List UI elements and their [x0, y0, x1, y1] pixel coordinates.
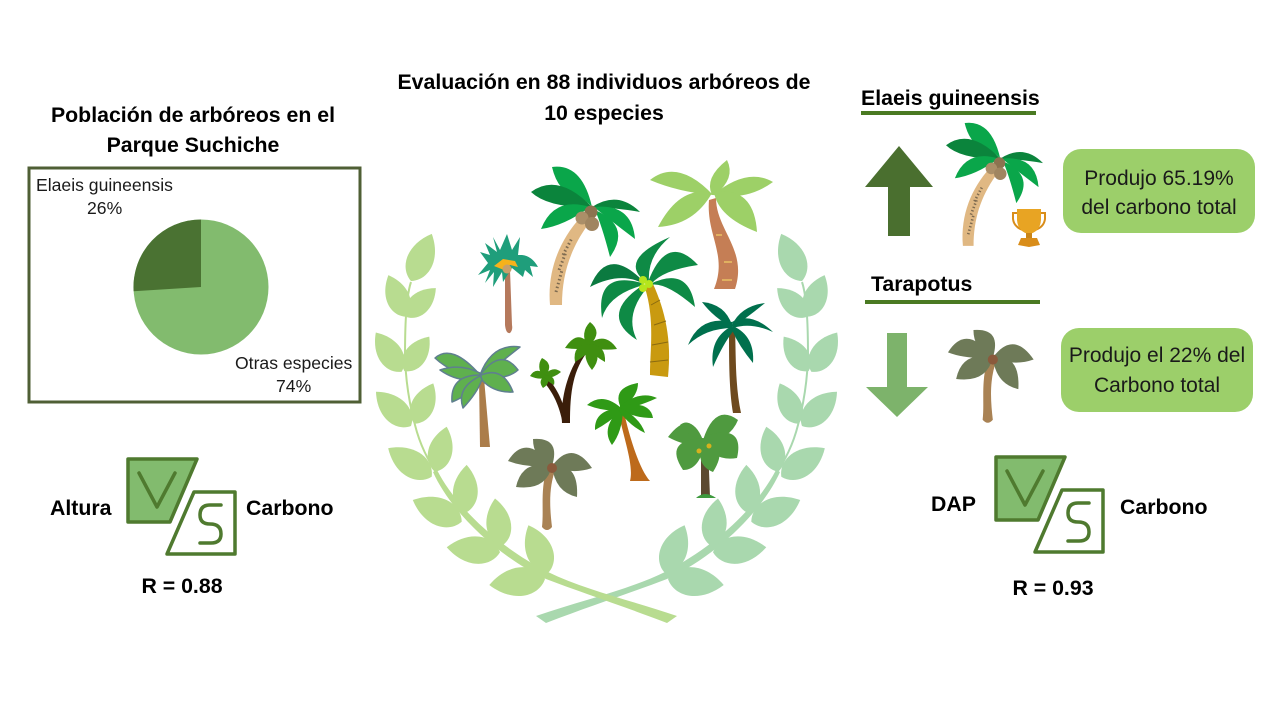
pie slice: Elaeis guineensis	[133, 219, 201, 291]
callout: 22%	[1061, 328, 1253, 412]
palm: coconut tan trunk	[531, 167, 640, 305]
callout: 65.19%: Produjo 65.19%	[1084, 167, 1234, 190]
panel: pie chart population	[29, 168, 360, 402]
underline: Elaeis guineensis	[861, 111, 1036, 115]
palm: central gold trunk	[590, 237, 698, 377]
arrow down	[866, 333, 928, 417]
pie label: otras especies: Otras especies	[235, 353, 353, 373]
palm: bright green orange trunk	[587, 383, 657, 481]
palm: round green with fruit	[668, 415, 738, 498]
palm: Tarapotus icon	[948, 330, 1034, 423]
right comparison: DAP vs carbono: DAP	[931, 492, 976, 516]
palm: teal small	[478, 234, 538, 333]
pie label: otras especies: 74%	[276, 376, 312, 396]
main title: 10 especies	[544, 101, 664, 125]
left comparison: altura vs carbono: Carbono	[246, 496, 334, 520]
callout: 65.19%: del carbono total	[1081, 196, 1237, 219]
palm: double dark trunk	[530, 322, 617, 423]
pie label: Elaeis guineensis	[36, 175, 173, 218]
pie label: Elaeis guineensis: Elaeis guineensis	[36, 175, 173, 195]
right comparison: DAP vs carbono: R = 0.93	[1012, 576, 1094, 600]
main title	[397, 70, 811, 125]
icon: VS right	[996, 457, 1103, 552]
laurel wreath right branch	[536, 229, 847, 623]
palm: dark teal tall	[688, 302, 773, 413]
pie label: Elaeis guineensis: 26%	[87, 198, 123, 218]
callout: 22%: Carbono total	[1094, 374, 1220, 397]
icon: VS left	[128, 459, 235, 554]
heading: Elaeis guineensis: Elaeis guineensis	[861, 86, 1040, 110]
heading: Tarapotus: Tarapotus	[871, 272, 972, 296]
callout: 65.19%	[1063, 149, 1255, 233]
pie slice: otras especies	[134, 220, 268, 354]
left comparison: altura vs carbono: R = 0.88	[141, 574, 223, 598]
left comparison: altura vs carbono	[50, 459, 334, 598]
palm: Elaeis guineensis icon	[946, 123, 1043, 246]
laurel wreath left branch	[366, 229, 677, 623]
palm: light green curved trunk	[650, 160, 773, 289]
pie chart heading	[51, 103, 335, 157]
icon: trophy	[1013, 209, 1045, 247]
arrow up	[865, 146, 933, 236]
main title: Evaluación en 88 individuos arbóreos de	[397, 70, 811, 94]
pie chart heading: Parque Suchiche	[107, 133, 280, 157]
palm: blue-green feathered	[435, 347, 520, 447]
underline: Tarapotus	[865, 300, 1040, 304]
right comparison: DAP vs carbono: Carbono	[1120, 495, 1208, 519]
pie label: otras especies	[235, 353, 353, 396]
right comparison: DAP vs carbono	[931, 457, 1208, 600]
callout: 22%: Produjo el 22% del	[1069, 344, 1245, 367]
left comparison: altura vs carbono: Altura	[50, 496, 112, 520]
palm: olive green	[508, 439, 592, 530]
pie chart heading: Población de arbóreos en el	[51, 103, 335, 127]
